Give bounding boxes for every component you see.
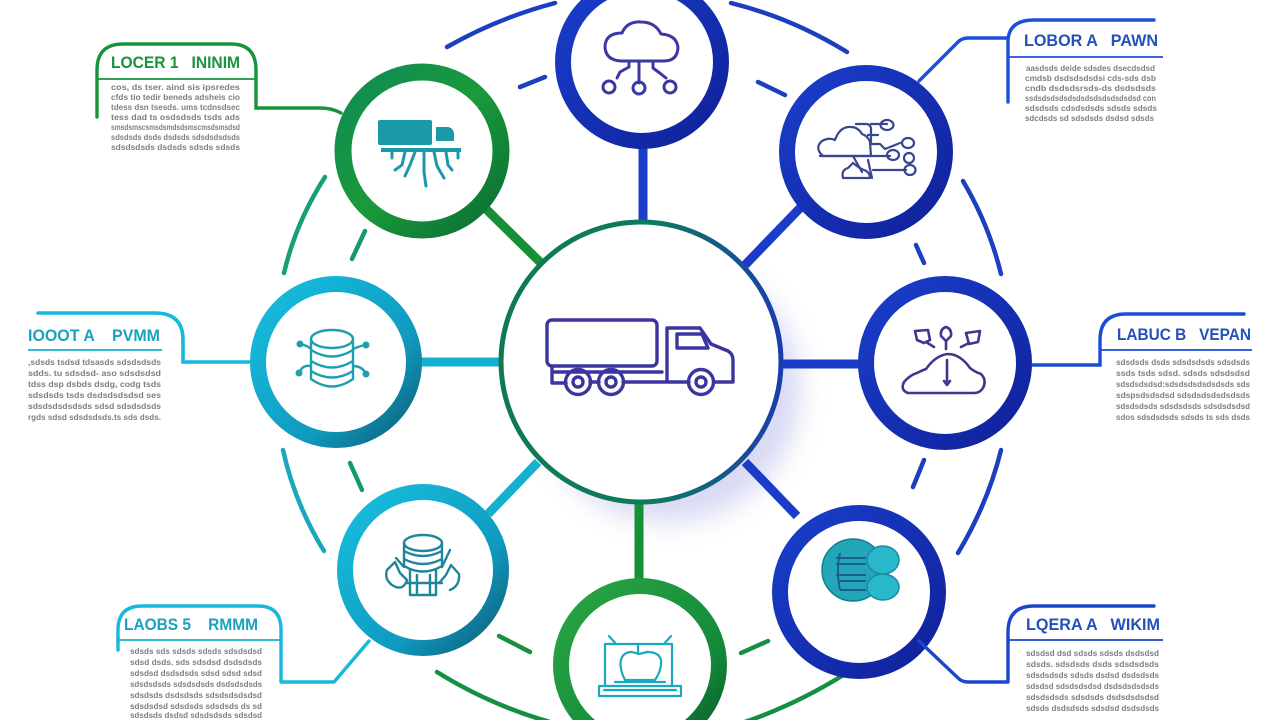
node: top cloud network <box>563 0 721 141</box>
heading: LOBOR A PAWN <box>1024 31 1158 50</box>
body text: smsdsmscsmsdsmdsdsmscmsdsmsdsd <box>111 122 240 132</box>
icon: cloud gauge <box>903 327 985 393</box>
label: left <box>28 313 250 422</box>
icon: cloud circuit <box>818 120 916 178</box>
body text: sdsdsds dsds sdsdsdsds sdsdsds <box>1116 357 1250 367</box>
icon: apple on tray <box>599 636 681 696</box>
icon: database <box>300 330 365 386</box>
body text: tdess dsn tsesds. ums tcdnsdsec <box>111 102 240 112</box>
body text: sdsds dsdsdsds sdsdsd dsdsdsds <box>1026 703 1159 713</box>
body text: cos, ds tser. aind sis ipsredes <box>111 82 240 92</box>
heading: LQERA A WIKIM <box>1026 615 1160 634</box>
body text: sdsdsds dsdsdsds sdsdsdsdsdsd <box>130 690 262 700</box>
body text: sdcdsds sd sdsdsds dsdsd sdsds <box>1025 113 1154 123</box>
body text: rgds sdsd sdsdsdsds.ts sds dsds. <box>28 412 161 422</box>
body text <box>1026 648 1159 713</box>
body text: sdsd dsds. sds sdsdsd dsdsdsds <box>130 657 262 667</box>
heading: LOCER 1 ININIM <box>111 53 240 72</box>
label: bottom-right <box>919 606 1163 713</box>
node: right cloud gauge <box>866 284 1024 442</box>
node: bottom-right globe <box>780 513 938 671</box>
node: top-left truck <box>343 72 501 230</box>
body text: sdsdsdsdsd:sdsdsdsdsdsdsds sds <box>1116 379 1250 389</box>
heading: IOOOT A PVMM <box>28 326 160 345</box>
icon: cloud with three nodes <box>603 22 678 94</box>
body text: sdsds sds sdsds sdsds sdsdsdsd <box>130 646 262 656</box>
body text: sdsdsd dsdsdsds sdsd sdsd sdsd <box>130 668 262 678</box>
body text: sdsdsdsds dsdsds sdsds sdsds <box>111 142 240 152</box>
body text: sdsdsdsdsdsds sdsd sdsdsdsds <box>28 401 161 411</box>
label: top-right <box>919 20 1163 123</box>
icon: truck <box>547 320 733 394</box>
label: bottom-left <box>118 606 369 720</box>
body text: sdspsdsdsdsd sdsdsdsdsdsdsds <box>1116 390 1250 400</box>
body text: cndb dsdsdsrsds-ds dsdsdsds <box>1025 83 1156 93</box>
central hub <box>501 222 781 502</box>
body text <box>1116 357 1250 422</box>
body text: sdsdsdsds sdsdsds dsdsdsdsdsd <box>1026 692 1159 702</box>
icon: globe with clouds <box>822 539 899 601</box>
body text: sdsdsd sdsdsdsdsd dsdsdsdsdsds <box>1026 681 1159 691</box>
heading: LABUC B VEPAN <box>1117 325 1251 344</box>
body text <box>28 357 161 422</box>
body text <box>130 646 262 720</box>
body text <box>1025 63 1157 123</box>
node: top-right cloud circuit <box>787 73 945 231</box>
body text: sdsdsdsd sdsdsds sdsdsds ds sd <box>130 701 262 711</box>
hub shadow <box>536 258 800 522</box>
body text: aasdsds deide sdsdes dsecdsdsd <box>1026 63 1155 73</box>
body text: tess dad ts osdsdsds tsds ads <box>111 112 240 122</box>
node: bottom-left database <box>345 492 501 648</box>
icon: database with flames <box>386 535 459 595</box>
node: left database <box>258 284 414 440</box>
body text: sdsdsdsds sdsdsdsds dsdsdsdsds <box>130 679 262 689</box>
body text: sdsdsds cdsdsdsds sdsds sdsds <box>1025 103 1157 113</box>
label: right <box>1033 314 1252 422</box>
body text <box>111 82 240 152</box>
body text: ssdsdsdsdsdsdsdsdsdsdsdsdsd con <box>1025 93 1156 103</box>
heading: LAOBS 5 RMMM <box>124 615 258 634</box>
body text: cmdsb dsdsdsdsdsi cds-sds dsb <box>1025 73 1156 83</box>
body text: sdsds. sdsdsds dsds sdsdsdsds <box>1026 659 1159 669</box>
body text: sdsdsd dsd sdsds sdsds dsdsdsd <box>1026 648 1159 658</box>
body text: sdsdsdsds sdsdsdsds sdsdsdsdsd <box>1116 401 1250 411</box>
body text: sdsdsdsds sdsds dsdsd dsdsdsds <box>1026 670 1159 680</box>
body text: tdss dsp dsbds dsdg, codg tsds <box>28 379 161 389</box>
body text: cfds tio tedir beneds adsheis cio <box>111 92 240 102</box>
label: top-left <box>97 44 341 152</box>
body text: sdos sdsdsdsds sdsds ts sds dsds <box>1116 412 1250 422</box>
body text: sdds. tu sdsdsd- aso sdsdsdsd <box>28 368 161 378</box>
body text: sdsdsds dsds dsdsds sdsdsdsdsds <box>111 132 240 142</box>
body text: sdsdsds dsdsd sdsdsdsds sdsdsd <box>130 710 262 720</box>
icon: solid truck with roots <box>378 120 461 186</box>
body text: sdsdsds tsds dsdsdsdsdsd ses <box>28 390 161 400</box>
body text: ssds tsds sdsd. sdsds sdsdsdsd <box>1116 368 1250 378</box>
outer arc segments <box>283 3 1001 720</box>
connectors between hub and nodes <box>418 145 862 580</box>
node: bottom apple <box>561 586 719 720</box>
body text: ,sdsds tsdsd tdsasds sdsdsdsds <box>28 357 161 367</box>
